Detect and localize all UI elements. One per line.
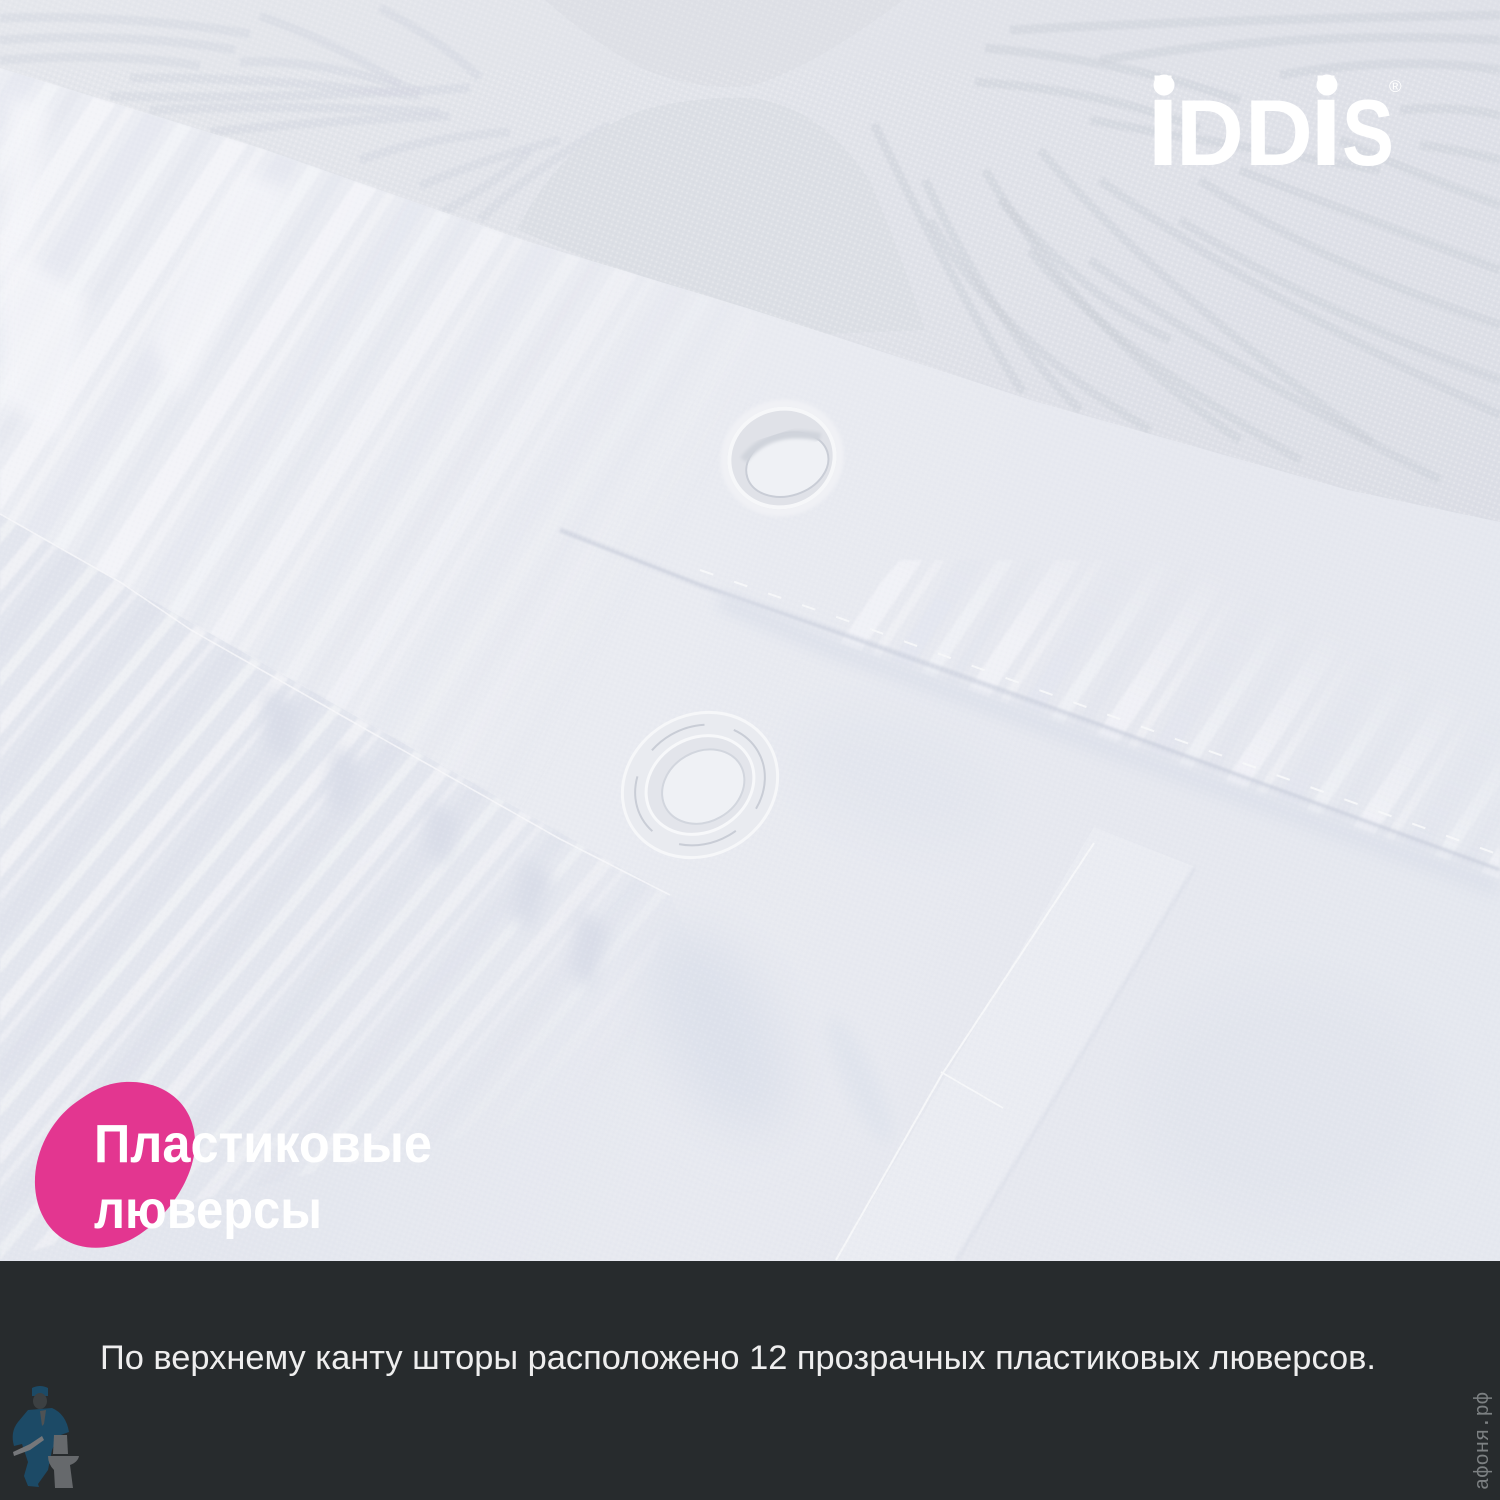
right lower fabric shading	[624, 686, 1440, 1220]
lobe: central circle	[517, 98, 925, 335]
shadows under stitch	[265, 690, 610, 990]
logo: iDDiS: i	[1309, 55, 1343, 192]
logo: iDDiS	[1146, 55, 1402, 192]
icon: lower grommet	[596, 684, 804, 886]
icon: plumber with toilet	[13, 1386, 79, 1488]
front fabric base	[0, 68, 1500, 1265]
watermark: афоня.рф	[1472, 1392, 1495, 1490]
icon: upper grommet	[705, 384, 859, 532]
pink blob	[35, 1082, 195, 1248]
top-left fan stripes	[0, 8, 610, 220]
hem corner fold	[836, 827, 1195, 1261]
heading: Пластиковые	[94, 1114, 432, 1174]
right hem stripes	[831, 560, 1500, 880]
logo: iDDiS: D	[1245, 80, 1313, 185]
lobe: upper circle	[545, 0, 903, 87]
logo: iDDiS: ®	[1389, 77, 1402, 96]
heading: люверсы	[94, 1180, 322, 1240]
logo: iDDiS: i	[1146, 55, 1180, 192]
right fan stripes	[874, 15, 1500, 480]
dark footer band	[0, 1261, 1500, 1500]
hem band stripes	[3, 100, 373, 575]
bright patches along hem edge	[0, 95, 290, 440]
logo: iDDiS: S	[1342, 80, 1394, 185]
heading	[94, 1114, 432, 1240]
description text: По верхнему канту шторы расположено 12 прозрачных пластиковых люверсов.	[100, 1339, 1376, 1377]
lower-left fabric with stripes	[0, 514, 670, 1230]
logo: iDDiS: D	[1176, 80, 1244, 185]
seam of top hem	[560, 530, 1500, 888]
